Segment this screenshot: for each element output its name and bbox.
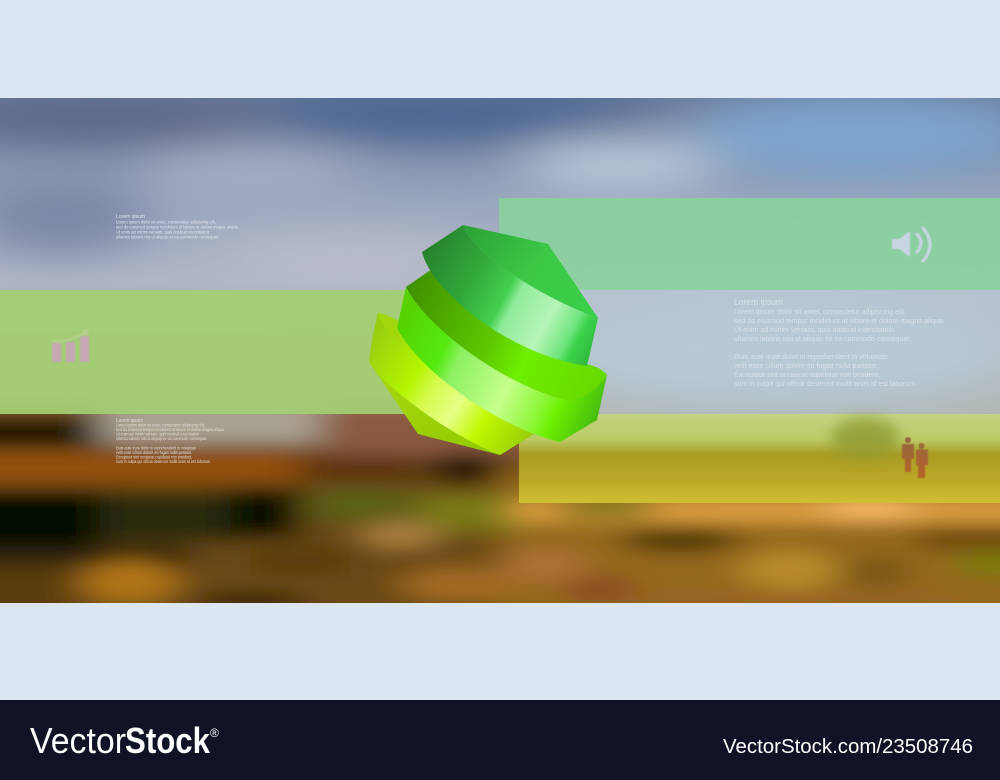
text block: lower left bbox=[116, 418, 225, 464]
footer bar bbox=[0, 700, 1000, 780]
logo: VectorStock: ® bbox=[210, 726, 219, 740]
text block: lower left: Lorem ipsum dolor sit amet, consectetur adipiscing elit, bbox=[116, 422, 205, 428]
text block: upper left: ullamco laboris nisi ut aliquip ex ea commodo consequat. bbox=[116, 234, 219, 240]
text block: right: Ut enim ad minim veniam, quis nostrud exercitation bbox=[734, 325, 894, 334]
text block: right: ullamco laboris nisi ut aliquip ex ea commodo consequat. bbox=[734, 334, 911, 343]
bottom rim bbox=[378, 313, 402, 345]
icon: speaker bbox=[892, 228, 930, 261]
blurred photo background bbox=[0, 91, 1000, 630]
icon: two people bbox=[902, 437, 928, 478]
heading: upper left: Lorem ipsum bbox=[116, 214, 145, 220]
text block: lower left: Excepteur sint occaecat cupidatat non proident, bbox=[116, 454, 192, 460]
text block: upper left bbox=[116, 214, 239, 240]
top cone bbox=[463, 225, 598, 318]
heading: right: Lorem ipsum bbox=[734, 297, 783, 307]
panel: lower right yellow strip bbox=[519, 414, 1000, 503]
slice: top bbox=[422, 225, 598, 366]
bottom band bbox=[369, 313, 534, 455]
logo: VectorStock: Stock bbox=[125, 720, 211, 761]
middle band bbox=[397, 287, 607, 442]
text block: lower left: sunt in culpa qui officia deserunt mollit anim id est laborum. bbox=[116, 459, 211, 464]
text block: right: sunt in culpa qui officia deserunt mollit anim id est laborum. bbox=[734, 379, 917, 388]
text block: upper left: Lorem ipsum dolor sit amet, consectetur adipiscing elit, bbox=[116, 220, 216, 224]
icon: bar chart bbox=[52, 330, 89, 362]
bottom cone bbox=[369, 362, 534, 455]
heading: lower left: Lorem ipsum bbox=[116, 418, 143, 424]
text block: lower left: Ut enim ad minim veniam, quis nostrud exercitation bbox=[116, 432, 199, 436]
text block: right: Lorem ipsum dolor sit amet, consectetur adipiscing elit, bbox=[734, 307, 906, 316]
text block: lower left: sed do eiusmod tempor incididunt ut labore et dolore magna aliqua. bbox=[116, 427, 225, 432]
image id text: VectorStock.com/23508746 bbox=[723, 736, 973, 758]
text block: right: Duis aute irure dolor in reprehenderit in voluptate bbox=[734, 352, 888, 361]
text block: upper left: Ut enim ad minim veniam, quis nostrud exercitation bbox=[116, 230, 209, 234]
text block: right: sed do eiusmod tempor incididunt ut labore et dolore magna aliqua. bbox=[734, 316, 945, 325]
text block: lower left: ullamco laboris nisi ut aliquip ex ea commodo consequat. bbox=[116, 436, 207, 441]
text block: lower left: velit esse cillum dolore eu fugiat nulla pariatur. bbox=[116, 450, 192, 455]
slice: bottom bbox=[369, 313, 534, 455]
top band bbox=[422, 225, 598, 366]
chart: sliced 3D sphere bbox=[369, 225, 607, 455]
text block: right bbox=[734, 297, 945, 388]
text block: right: Excepteur sint occaecat cupidatat non proident, bbox=[734, 370, 880, 379]
text block: lower left: Duis aute irure dolor in reprehenderit in voluptate bbox=[116, 446, 196, 450]
slice: middle bbox=[397, 269, 607, 442]
panel: middle right pale strip bbox=[580, 290, 1000, 414]
logo: VectorStock bbox=[30, 720, 219, 761]
logo: VectorStock: Vector bbox=[30, 720, 126, 761]
text block: upper left: sed do eiusmod tempor incididunt ut labore et dolore magna aliqua. bbox=[116, 224, 239, 230]
panel: middle left green strip bbox=[0, 290, 410, 414]
text block: right: velit esse cillum dolore eu fugiat nulla pariatur. bbox=[734, 361, 878, 370]
middle top rim bbox=[406, 269, 607, 401]
panel: top right green strip bbox=[499, 198, 1000, 290]
